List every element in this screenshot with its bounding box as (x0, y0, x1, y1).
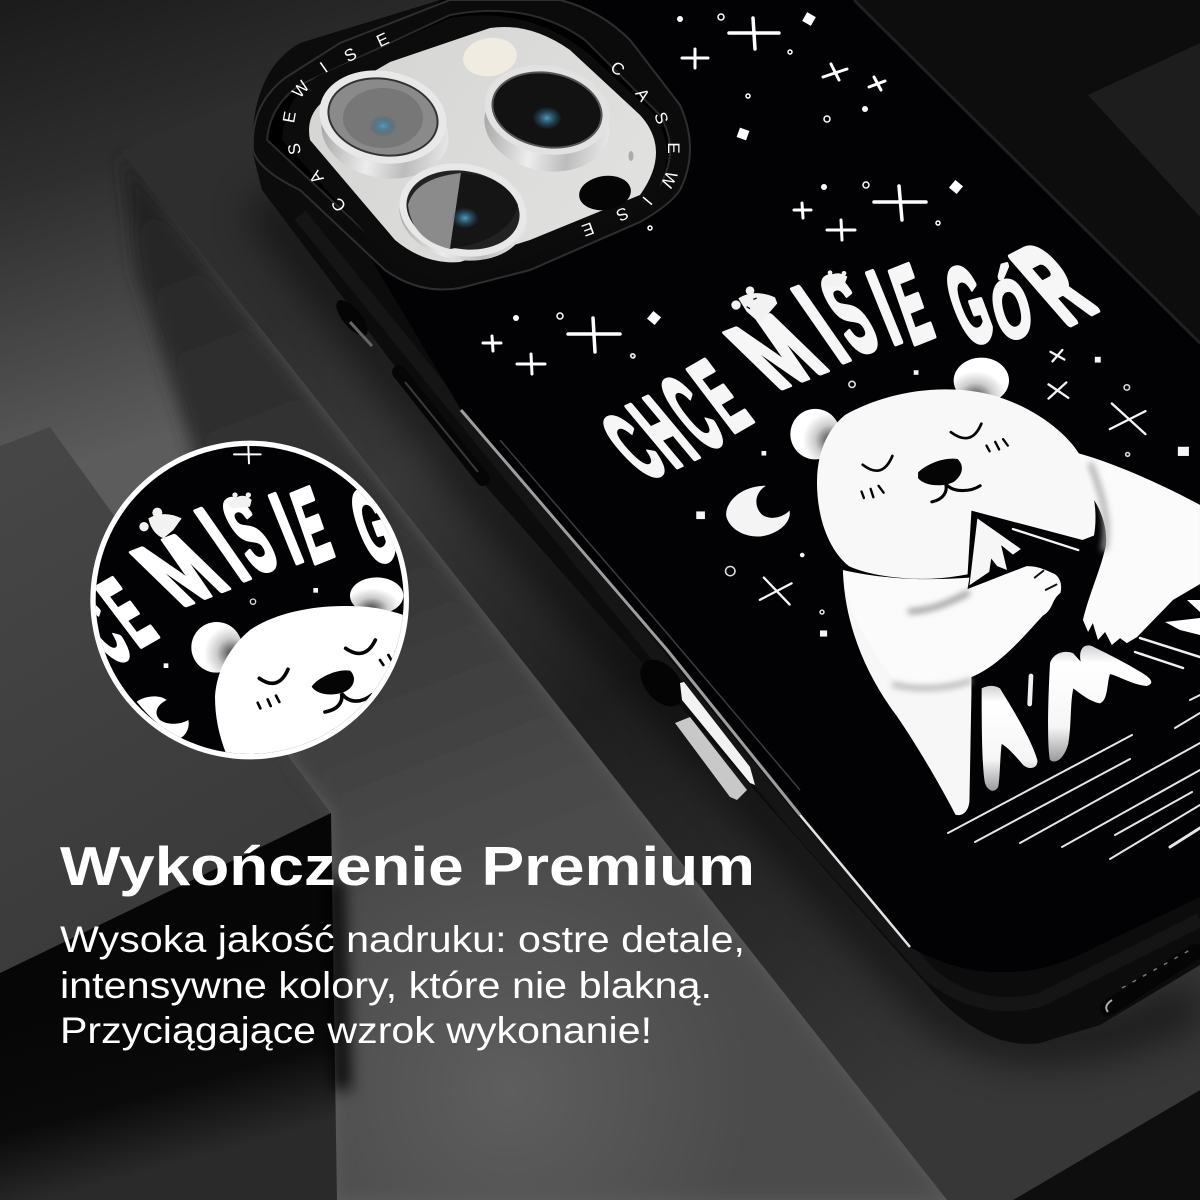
circle white border (90, 441, 409, 759)
artwork title lettering with little bears (582, 224, 1116, 499)
brand ring text: C (607, 58, 628, 80)
circle black fill (96, 446, 404, 754)
belly shadow (892, 680, 971, 688)
zoomed title: I (177, 486, 268, 603)
arm shadow (908, 592, 969, 611)
lens 2 (477, 56, 617, 181)
zoomed mouth (325, 693, 372, 712)
zoomed title: M (111, 519, 250, 624)
edge highlight (461, 410, 800, 815)
background: soft shadow edge (335, 880, 342, 1090)
bear head (817, 389, 1096, 579)
bear left ear (790, 409, 840, 459)
brand ring text: E (664, 142, 683, 154)
title letters: E (671, 339, 769, 452)
stars around bear (760, 350, 1145, 604)
zoomed moon (137, 696, 189, 738)
zoomed title: E (281, 466, 343, 585)
title letters (582, 224, 1116, 499)
brand ring text (279, 29, 683, 240)
zoomed title: C (51, 575, 150, 684)
bear right ear (954, 358, 1009, 404)
brand ring text: C (328, 194, 350, 215)
brand ring text: I (638, 193, 656, 208)
background: dark shadowed face lower left (0, 813, 337, 1200)
small bear on letter S (823, 270, 847, 286)
snow strip right (1048, 645, 1151, 761)
background: dark front face lower right (1013, 1090, 1200, 1200)
zoomed small bear 1 (139, 508, 182, 538)
title letters: H (609, 378, 718, 488)
title letters: C (641, 357, 744, 472)
title letters: S (803, 253, 896, 378)
bottom port (1106, 950, 1195, 1012)
zoomed small bear 2 (228, 492, 252, 508)
phone (252, 0, 1200, 1044)
brand ring text: S (284, 142, 305, 156)
circle clipped art (96, 446, 404, 754)
zoomed star (234, 447, 261, 463)
brand ring text: E (374, 29, 392, 51)
lens 3 (392, 154, 534, 270)
zoomed title: H (21, 595, 125, 699)
phone shadow (262, 200, 1200, 1043)
case side sheen (300, 215, 1200, 1004)
body text (60, 919, 745, 1051)
background: floor glow (260, 860, 780, 1200)
zoomed ring (250, 599, 256, 604)
lower mountain snow (982, 645, 1151, 791)
side hole (331, 295, 373, 346)
dots around bear (696, 357, 1189, 637)
brand ring text: S (613, 203, 631, 225)
title letters: E (879, 241, 944, 368)
heading: Wykończenie Premium (60, 835, 755, 897)
side button (399, 372, 483, 479)
zoomed title: G (337, 467, 409, 585)
title letters: M (703, 297, 850, 408)
bear left arm with hand (843, 566, 1061, 685)
moon (726, 486, 790, 537)
island gloss ring (267, 11, 670, 276)
brand ring text: A (305, 167, 328, 187)
background: large block side face (121, 151, 947, 1200)
body text: Wysoka jakość nadruku: ostre detale, (60, 919, 745, 960)
title letters: I (773, 263, 869, 386)
brand ring text: A (631, 85, 654, 105)
flash (461, 34, 519, 80)
camera island (253, 0, 690, 290)
zoomed eyes (259, 640, 375, 683)
neck shadow (1090, 463, 1106, 551)
text ring (282, 15, 666, 280)
brand ring text: W (657, 168, 681, 191)
edge highlight bright (800, 815, 910, 947)
zoomed title (21, 466, 409, 699)
edge thin line (500, 440, 800, 790)
body text: intensywne kolory, które nie blakną. (60, 965, 712, 1006)
zoomed left ear (191, 622, 242, 673)
mountain snow cap (969, 518, 1021, 585)
rings around bear (631, 354, 1130, 614)
brand ring text: S (341, 44, 360, 66)
stars on phone back (483, 12, 963, 374)
detail circle (90, 440, 409, 760)
zoomed title: I (258, 474, 314, 585)
hand finger marks (1035, 571, 1056, 590)
zoomed dots (164, 588, 318, 668)
mountain crack (1030, 676, 1031, 704)
brand ring text: I (316, 58, 331, 77)
background: top-right block face (1088, 43, 1200, 217)
bear right arm with fingers (1078, 453, 1200, 645)
phone black back plate (330, 0, 1200, 972)
bear eyes (863, 424, 981, 471)
zoomed title: E (80, 559, 174, 666)
side silver lever (632, 651, 755, 800)
title letters: C (582, 396, 686, 499)
artwork: bear hugging mountain (631, 350, 1200, 815)
small sensor (628, 151, 634, 161)
title letters: R (992, 224, 1116, 346)
zoomed title: S (206, 476, 294, 596)
bear cheek marks (862, 439, 1008, 498)
brand ring text: W (288, 77, 313, 102)
zoomed nose (312, 670, 354, 694)
lens 1 (312, 61, 456, 188)
brand ring text: E (579, 218, 596, 240)
title letters: I (855, 250, 914, 368)
bear lower body (843, 572, 971, 815)
zoomed cheek marks (258, 652, 399, 708)
zoomed right ear (350, 577, 403, 614)
bear mouth (932, 484, 980, 502)
phone case body (252, 0, 1200, 1044)
camera window (309, 27, 656, 262)
zoomed bear head (215, 606, 403, 754)
background: top-right dark backdrop (854, 0, 1200, 343)
title letters: Ó (982, 261, 1042, 359)
title letters: G (932, 242, 1007, 367)
small bear on letter M (731, 286, 777, 323)
mountain dark peak (967, 511, 1102, 624)
right edge strip (854, 0, 1200, 343)
background: lower-left block top face (0, 427, 331, 973)
snow strip left (982, 686, 1037, 791)
brand ring text: S (650, 110, 672, 127)
mountain ridge line (1013, 529, 1078, 550)
brand ring text: E (279, 110, 300, 124)
right side snow and lines (1135, 600, 1200, 668)
microphone hole (577, 173, 633, 213)
body text: Przyciągające wzrok wykonanie! (60, 1010, 652, 1051)
bear nose (918, 459, 962, 485)
island outer bezel (253, 0, 690, 290)
ground lines (948, 695, 1200, 859)
